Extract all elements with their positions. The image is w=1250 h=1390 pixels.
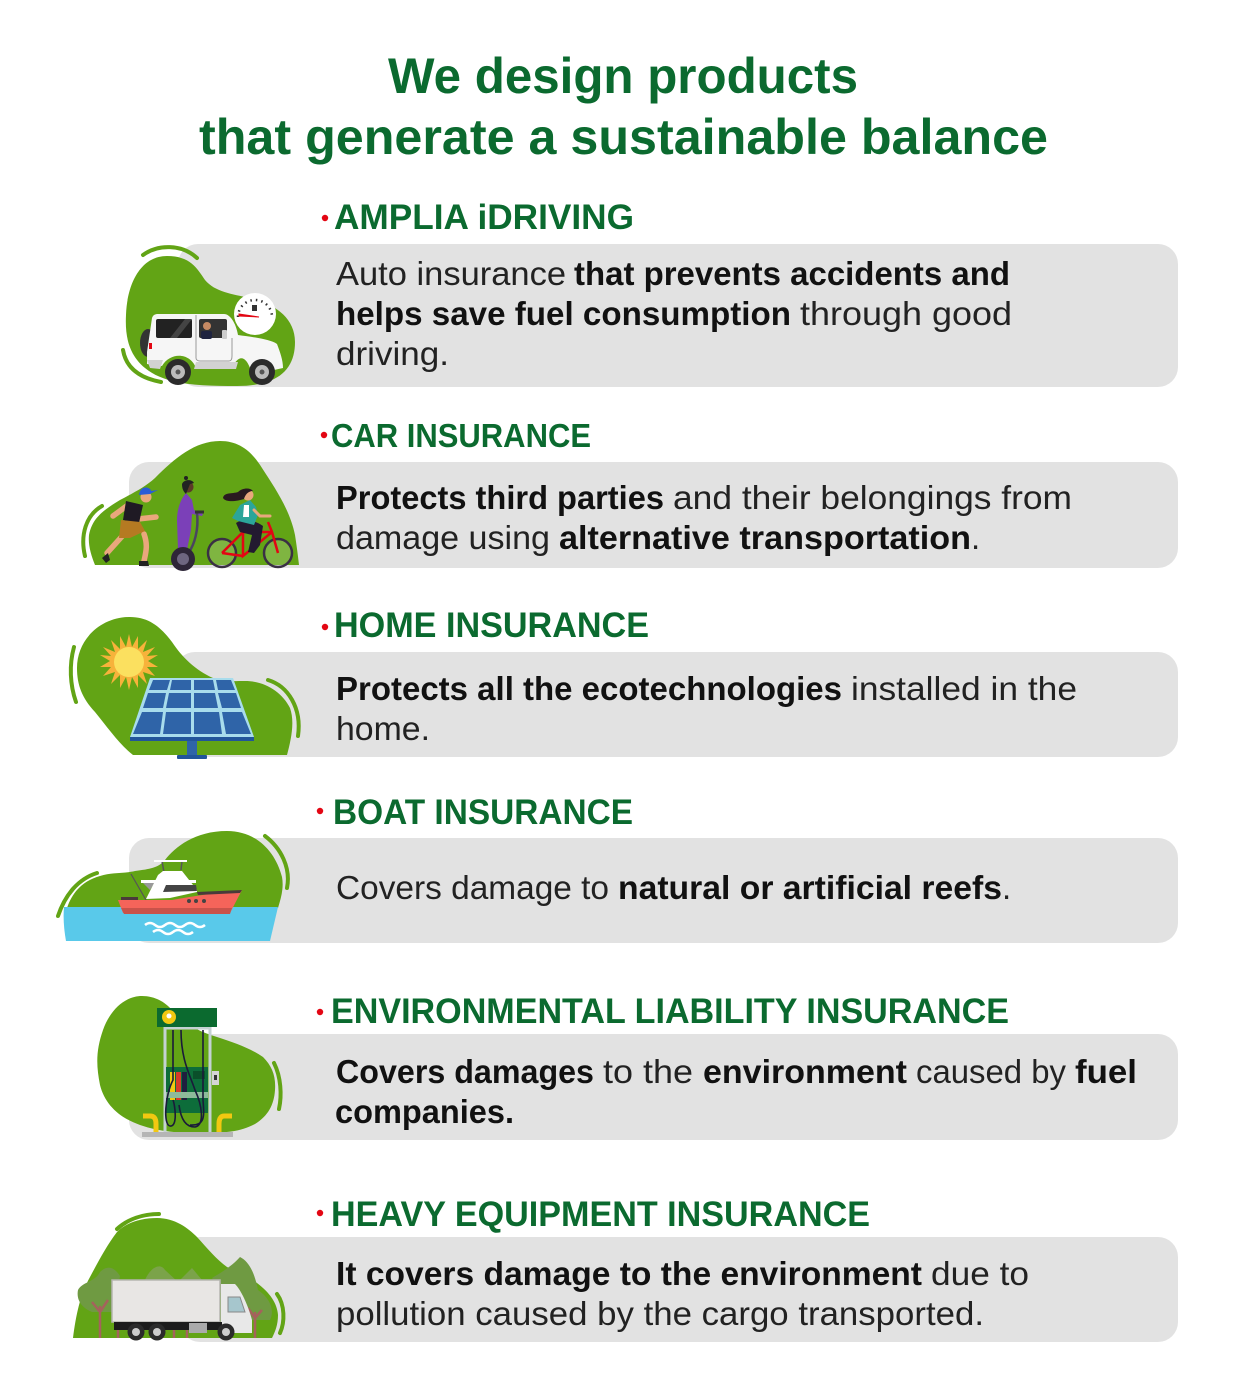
text block: Covers damages xyxy=(336,1053,594,1090)
title xyxy=(199,48,1048,165)
text block xyxy=(336,1255,1029,1332)
heading: Amplia iDriving: AMPLIA iDRIVING xyxy=(334,198,634,237)
icon: jeep with speedometer xyxy=(123,247,295,386)
text block xyxy=(336,869,1011,906)
text block xyxy=(336,670,1077,747)
heading: Boat insurance: BOAT INSURANCE xyxy=(333,793,633,832)
card background xyxy=(129,838,1178,943)
text block: . xyxy=(971,519,980,556)
heading: Environmental liability insurance: ENVIRONMENTAL LIABILITY INSURANCE xyxy=(331,992,1009,1031)
truck xyxy=(112,1280,252,1340)
text block: driving. xyxy=(336,335,449,372)
text block: that prevents accidents and xyxy=(574,255,1010,292)
panel: Boat insurance xyxy=(58,793,1178,943)
text block: environment xyxy=(703,1053,907,1090)
trees xyxy=(78,1257,272,1338)
text block xyxy=(335,1053,1137,1130)
icon: truck and trees xyxy=(73,1214,283,1340)
text block: caused by xyxy=(916,1053,1066,1090)
card background xyxy=(180,1237,1178,1342)
panel: Home insurance xyxy=(71,606,1178,759)
text block xyxy=(336,255,1012,372)
panel: Car insurance xyxy=(83,417,1178,571)
heading: Car insurance: CAR INSURANCE xyxy=(331,417,591,454)
text block: pollution caused by the cargo transported. xyxy=(336,1295,984,1332)
panel: Environmental liability insurance xyxy=(97,992,1178,1140)
title: that generate a sustainable balance xyxy=(199,109,1048,165)
text block: home. xyxy=(336,710,430,747)
text block: to the xyxy=(603,1053,693,1090)
text block: companies. xyxy=(335,1093,514,1130)
text block: due to xyxy=(931,1255,1029,1292)
text block: Protects third parties xyxy=(336,479,664,516)
icon: solar panel and sun xyxy=(71,617,299,759)
icon: boat on water xyxy=(58,831,288,941)
title: We design products xyxy=(388,48,858,104)
text block: fuel xyxy=(1075,1053,1137,1090)
text block: and their belongings from xyxy=(673,479,1072,516)
text block: Covers damage to xyxy=(336,869,609,906)
text block xyxy=(336,479,1072,556)
icon: fuel pump xyxy=(97,996,281,1137)
panel: Heavy equipment insurance xyxy=(73,1195,1178,1342)
sun xyxy=(100,634,158,690)
text block: It covers damage to the environment xyxy=(336,1255,922,1292)
panel: Amplia iDriving xyxy=(123,198,1178,387)
text block: through good xyxy=(800,295,1012,332)
text block: helps save fuel consumption xyxy=(336,295,791,332)
text block: natural or artificial reefs xyxy=(618,869,1002,906)
card background xyxy=(175,652,1178,757)
text block: Auto insurance xyxy=(336,255,566,292)
heading: Heavy equipment insurance: HEAVY EQUIPMENT INSURANCE xyxy=(331,1195,870,1234)
card background xyxy=(178,244,1178,387)
text block: alternative transportation xyxy=(559,519,971,556)
heading: Home insurance: HOME INSURANCE xyxy=(334,606,649,645)
segway rider xyxy=(171,476,204,571)
card background xyxy=(129,462,1178,568)
text block: Protects all the ecotechnologies xyxy=(336,670,842,707)
text block: . xyxy=(1002,869,1011,906)
text block: installed in the xyxy=(851,670,1077,707)
card background xyxy=(129,1034,1178,1140)
text block: damage using xyxy=(336,519,550,556)
solar array xyxy=(130,678,254,759)
bicycle rider xyxy=(208,488,292,567)
icon: skater, segway and bicycle riders xyxy=(83,441,299,571)
skater xyxy=(102,487,158,566)
